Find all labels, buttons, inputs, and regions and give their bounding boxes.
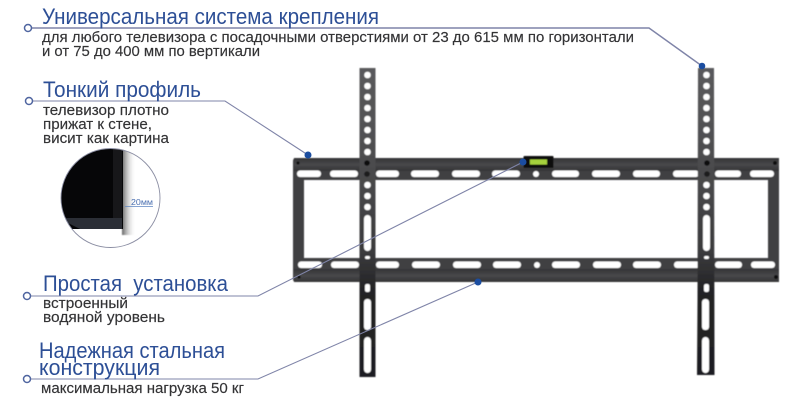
right upright — [697, 68, 714, 375]
description: максимальная нагрузка 50 кг — [41, 381, 244, 397]
dimension label: 20мм — [131, 197, 153, 207]
callout start rings — [24, 24, 32, 382]
heading: Простая установка — [43, 271, 229, 296]
left upright — [360, 68, 376, 377]
magnified inset: 20 mm profile — [58, 145, 160, 248]
callout end dots — [304, 63, 705, 286]
description — [43, 103, 170, 147]
block: universal mounting system — [42, 4, 634, 60]
water level — [524, 156, 554, 168]
heading — [39, 338, 225, 380]
heading: конструкция — [39, 355, 160, 380]
description: висит как картина — [43, 131, 170, 147]
description: для любого телевизора с посадочными отверстиями от 23 до 615 мм по горизонтали — [42, 30, 634, 46]
block: slim profile — [43, 77, 201, 147]
description: прижат к стене, — [43, 117, 152, 133]
description: водяной уровень — [43, 310, 165, 326]
dimension line — [125, 206, 153, 208]
heading: Тонкий профиль — [43, 77, 201, 102]
description: встроенный — [43, 296, 128, 312]
wall mount bracket — [293, 68, 779, 377]
heading: Надежная стальная — [39, 338, 225, 363]
description — [42, 30, 634, 60]
mount frame — [293, 158, 779, 282]
description: и от 75 до 400 мм по вертикали — [42, 44, 260, 60]
description — [43, 296, 165, 326]
block: easy installation — [43, 271, 229, 326]
heading: Универсальная система крепления — [42, 4, 379, 29]
callout lines — [31, 28, 702, 379]
block: reliable steel construction — [39, 338, 244, 397]
description: телевизор плотно — [43, 103, 169, 119]
